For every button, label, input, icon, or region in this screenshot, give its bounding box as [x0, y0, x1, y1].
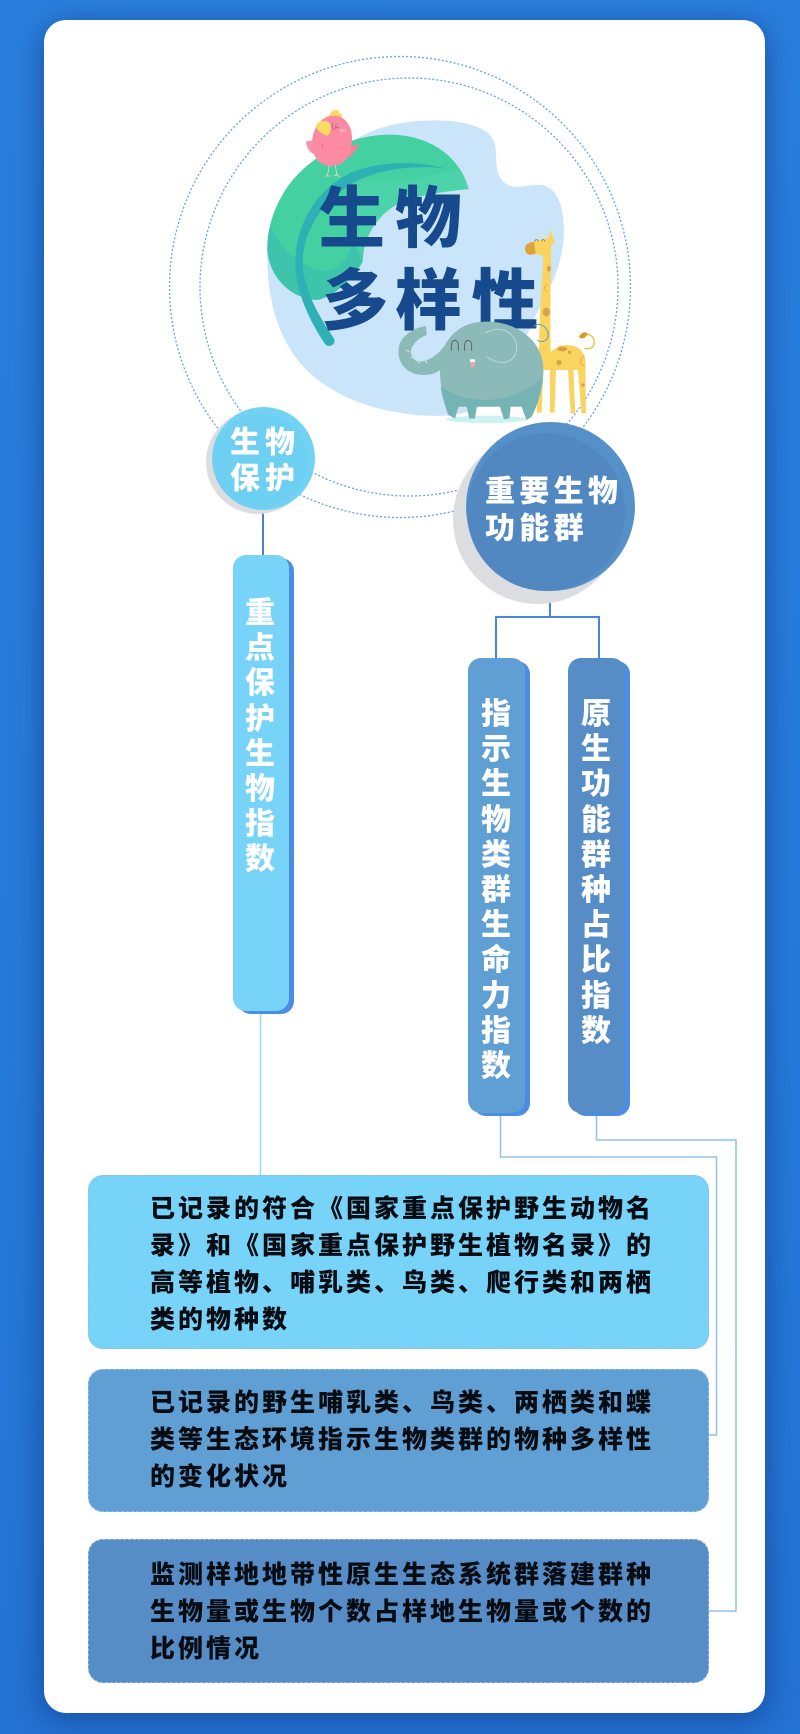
circle: 生物保护: 保护 — [230, 462, 300, 496]
connector: functional group tree — [496, 591, 599, 660]
card: indicator species description: 的变化状况 — [150, 1463, 290, 1491]
card: protected species description — [88, 1175, 709, 1349]
card: indicator species description — [88, 1369, 709, 1512]
bar: 重点保护生物指数: 重点保护生物指数 — [245, 597, 275, 876]
title: 生物多样性: 生物 — [318, 182, 462, 256]
card: protected species description: 已记录的符合《国家重点保护野生动物名 — [150, 1195, 654, 1223]
card: native functional group description: 监测样地地带性原生生态系统群落建群种 — [150, 1561, 654, 1589]
bar: 指示生物类群生命力指数 — [468, 658, 530, 1116]
bird — [306, 110, 359, 177]
connector: bar 1 to card 1 — [260, 1012, 262, 1176]
giraffe — [525, 230, 594, 413]
pale blue blob — [267, 120, 564, 416]
hero illustration — [267, 110, 594, 423]
connector: protection circle to bar — [262, 510, 264, 556]
bar: 指示生物类群生命力指数: 指示生物类群生命力指数 — [481, 698, 511, 1083]
circle: 生物保护: 生物 — [230, 426, 300, 460]
card: native functional group description: 比例情况 — [150, 1635, 262, 1663]
circle: 重要生物功能群: 功能群 — [485, 512, 588, 546]
card: protected species description: 类的物种数 — [150, 1306, 290, 1334]
card: indicator species description: 类等生态环境指示生物类群的物种多样性 — [150, 1426, 654, 1454]
card: protected species description: 录》和《国家重点保护野生植物名录》的 — [150, 1232, 654, 1260]
card: indicator species description: 已记录的野生哺乳类、鸟类、两栖类和蝶 — [150, 1389, 654, 1417]
card: native functional group description — [88, 1539, 709, 1683]
circle: 生物保护 — [206, 407, 315, 514]
circle: 重要生物功能群 — [453, 422, 635, 604]
connector: bar 2 to card 2 — [500, 1114, 716, 1435]
title: 生物多样性: 多样性 — [322, 265, 538, 339]
card: native functional group description: 生物量或生物个数占样地生物量或个数的 — [150, 1598, 654, 1626]
title: 生物多样性 — [318, 182, 538, 339]
circle: 重要生物功能群: 重要生物 — [485, 476, 622, 508]
connector: bar 3 to card 3 — [596, 1114, 736, 1611]
dotted rings — [170, 56, 630, 518]
leaf — [267, 135, 469, 346]
elephant — [398, 322, 548, 423]
bar: 原生功能群种占比指数: 原生功能群种占比指数 — [581, 698, 611, 1048]
card: protected species description: 高等植物、哺乳类、鸟类、爬行类和两栖 — [150, 1269, 654, 1297]
bar: 重点保护生物指数 — [233, 555, 294, 1014]
bar: 原生功能群种占比指数 — [568, 658, 630, 1116]
